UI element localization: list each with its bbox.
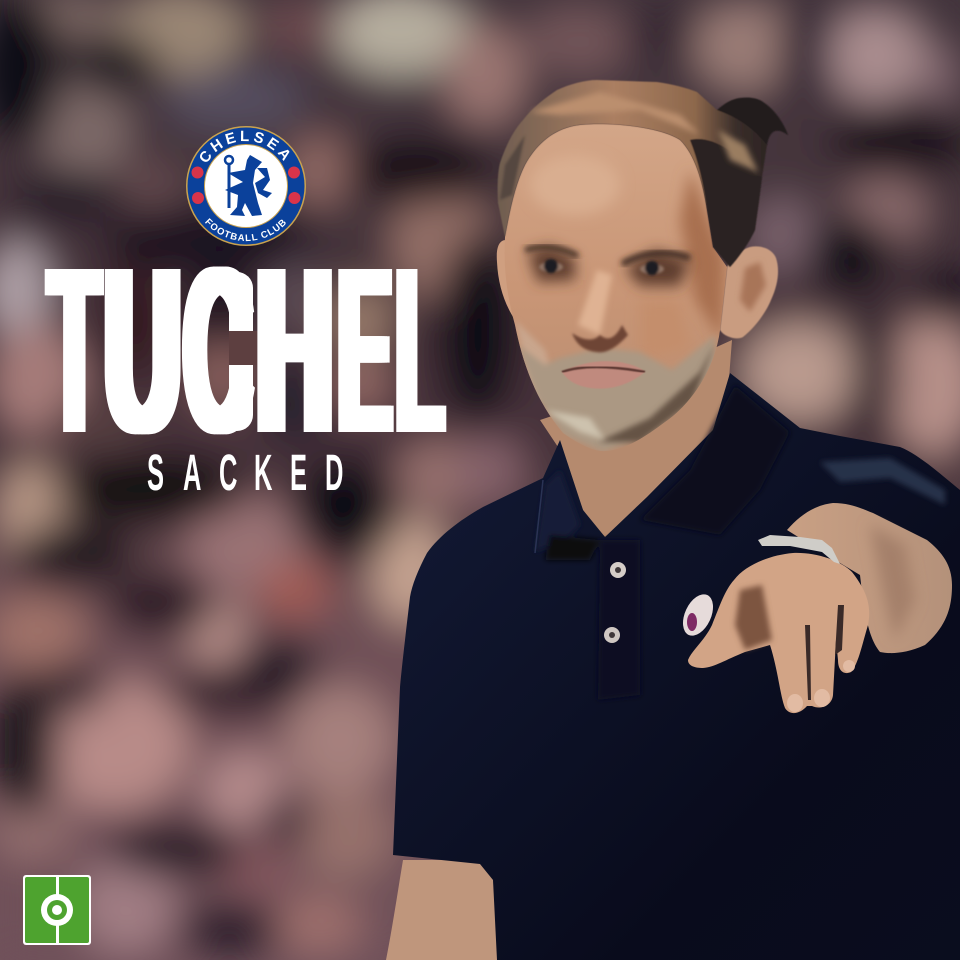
watch bbox=[758, 535, 840, 564]
badge bbox=[677, 590, 719, 640]
left arm bbox=[386, 860, 498, 960]
beard bbox=[518, 335, 715, 452]
hand bbox=[688, 553, 869, 713]
crest wordmark top: CHELSEA bbox=[200, 130, 290, 162]
title: TUCHEL: T bbox=[49, 218, 100, 483]
eye right bbox=[640, 261, 664, 275]
title: TUCHEL: L bbox=[396, 218, 444, 483]
title: TUCHEL: C bbox=[184, 218, 251, 483]
title: TUCHEL: H bbox=[257, 218, 332, 483]
crest lion bbox=[225, 155, 272, 216]
mouth bbox=[562, 361, 645, 389]
neck bbox=[540, 340, 732, 537]
left ear bbox=[497, 240, 515, 320]
nose shadow bbox=[572, 325, 628, 352]
photo: Tuchel portrait bbox=[386, 80, 960, 960]
crest wordmark bottom: FOOTBALL CLUB bbox=[205, 218, 286, 242]
face bbox=[505, 124, 727, 452]
crest balls bbox=[192, 166, 300, 204]
brows and eye sockets bbox=[528, 246, 575, 282]
polo shirt bbox=[393, 373, 960, 960]
title: TUCHEL: U bbox=[105, 218, 180, 483]
shirt shading bbox=[535, 385, 945, 700]
collar edge bbox=[535, 480, 543, 553]
button bottom bbox=[604, 627, 620, 643]
button top bbox=[610, 562, 626, 578]
hair bbox=[498, 80, 788, 267]
title: TUCHEL: E bbox=[338, 218, 391, 483]
forearm shading bbox=[870, 525, 915, 640]
subtitle: SACKED: SACKED bbox=[147, 444, 343, 501]
eye left bbox=[539, 259, 563, 273]
ear bbox=[720, 246, 778, 338]
forearm bbox=[787, 503, 952, 653]
